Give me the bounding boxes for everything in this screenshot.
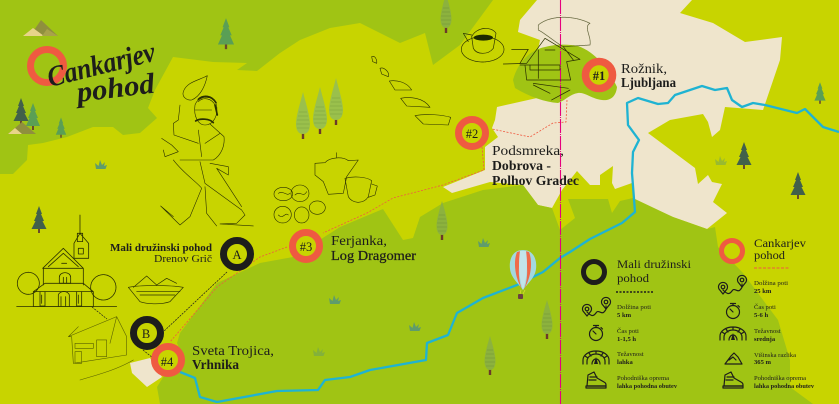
- icon: gauge: [720, 327, 746, 340]
- marker: #3 Ferjanka: [292, 232, 320, 260]
- marker: #1 Rožnik: [586, 62, 612, 88]
- label: Podsmreka, Dobrova - Polhov Gradec: [492, 143, 579, 188]
- marker: #2 Podsmreka: #2: [466, 127, 478, 141]
- text: distance: Dolžina poti: [617, 304, 651, 311]
- drawing: coffee cup: [461, 28, 504, 62]
- text: difficulty: lahka: [617, 359, 633, 366]
- label: Podsmreka, Dobrova - Polhov Gradec: Polhov Gradec: [492, 173, 579, 188]
- marker: B: B: [142, 327, 150, 341]
- label: Ferjanka, Log Dragomer: Log Dragomer: [331, 248, 417, 263]
- river: [180, 86, 839, 402]
- legend: Mali družinski pohod: [582, 257, 692, 390]
- text: gear: lahka pohodna obutev: [617, 383, 678, 390]
- text: time: 1-1,5 h: [617, 336, 636, 343]
- text: gear: Pohodniška oprema: [754, 375, 806, 382]
- marker: A: [224, 240, 250, 268]
- marker: #1 Rožnik: #1: [593, 69, 605, 83]
- marker: B: [134, 320, 160, 346]
- icon: cypress trees: [296, 0, 552, 375]
- label: Mali družinski pohod Drenov Grič: Mali družinski pohod: [110, 243, 212, 254]
- region: Rožnik forest: [513, 45, 617, 103]
- black dashed route: [92, 272, 227, 358]
- region: lower forest: [157, 185, 813, 404]
- text: difficulty: Težavnost: [617, 351, 644, 358]
- icon: boot: [723, 372, 743, 388]
- text: distance: [617, 304, 651, 319]
- icon: boot: [586, 372, 606, 388]
- drawing: pastries: [274, 185, 325, 223]
- text: distance: [754, 280, 788, 295]
- text: gear: [617, 375, 678, 390]
- drawing: Rožnik inn: [503, 17, 590, 100]
- text: time: 5-6 h: [754, 312, 768, 319]
- text: difficulty: srednja: [754, 336, 776, 343]
- text: time: [754, 303, 776, 319]
- municipal border line: [560, 0, 562, 404]
- drawing: farmhouse: [68, 317, 133, 380]
- text: difficulty: Težavnost: [754, 328, 781, 335]
- text: elevation: 365 m: [754, 359, 772, 366]
- marker: #4 Sveta Trojica: #4: [161, 355, 174, 369]
- text: gear: lahka pohodna obutev: [754, 383, 815, 390]
- text: distance: 25 km: [754, 288, 772, 295]
- icon: pine top: [218, 18, 234, 49]
- drawing: church: [17, 215, 117, 307]
- hot-air balloon: [510, 250, 536, 299]
- icon: grass tufts: [95, 156, 727, 356]
- marker: #4 Sveta Trojica: [154, 346, 182, 374]
- drawing: coffee pot and cups: [315, 153, 377, 202]
- marker: #2 Podsmreka: [458, 120, 486, 146]
- label: Ferjanka, Log Dragomer: Ferjanka,: [331, 233, 387, 248]
- icon: stopwatch: [590, 326, 602, 340]
- icon: gauge: [583, 351, 609, 364]
- logo: Cankarjev pohod: pohod: [72, 68, 157, 109]
- icon: mountain: [725, 353, 742, 364]
- text: difficulty: [754, 328, 781, 343]
- red dashed route: [170, 100, 567, 342]
- text: time: Čas poti: [754, 303, 776, 311]
- label: Rožnik, Ljubljana: [621, 61, 676, 90]
- legend ring red: [722, 240, 742, 262]
- text: elevation: [754, 352, 796, 366]
- text: elevation: Višinska razlika: [754, 352, 796, 359]
- logo ring: [30, 50, 64, 82]
- logo: Cankarjev pohod: [30, 36, 159, 109]
- label: Sveta Trojica, Vrhnika: [192, 343, 274, 372]
- icon: pine trees and hill left: [8, 98, 66, 138]
- legend heading: Mali družinski: [617, 257, 692, 271]
- label: Rožnik, Ljubljana: Ljubljana: [621, 75, 676, 90]
- drawing: basket: [128, 276, 183, 304]
- legend heading: [617, 257, 692, 285]
- label: Sveta Trojica, Vrhnika: Vrhnika: [192, 357, 239, 372]
- icon: stopwatch: [726, 304, 740, 318]
- text: gear: Pohodniška oprema: [617, 375, 669, 382]
- legend heading: Cankarjev: [754, 236, 806, 250]
- region: upper-left forest: [0, 0, 493, 174]
- label: Ferjanka, Log Dragomer: [331, 233, 417, 263]
- label: Podsmreka, Dobrova - Polhov Gradec: Dobrova -: [492, 158, 551, 173]
- icon: pines right: [736, 82, 826, 199]
- text: time: Čas poti: [617, 327, 639, 335]
- label: Sveta Trojica, Vrhnika: Sveta Trojica,: [192, 343, 274, 358]
- legend ring black: [584, 262, 604, 282]
- icon: route: [582, 297, 610, 316]
- drawing: Ivan Cankar figure: [161, 76, 253, 226]
- text: gear: [754, 375, 815, 390]
- icon: hills top: [23, 20, 58, 36]
- icon: route: [718, 275, 746, 294]
- logo: Cankarjev pohod: Cankarjev: [44, 36, 159, 94]
- label: Rožnik, Ljubljana: Rožnik,: [621, 61, 667, 76]
- icon: pine left: [32, 206, 46, 233]
- label: Podsmreka, Dobrova - Polhov Gradec: Podsmreka,: [492, 143, 564, 158]
- legend heading: [754, 236, 806, 262]
- label: Mali družinski pohod Drenov Grič: Drenov Grič: [154, 254, 212, 265]
- legend heading: pohod: [754, 248, 785, 262]
- label: Mali družinski pohod Drenov Grič: [110, 243, 212, 265]
- legend heading: pohod: [617, 271, 649, 285]
- marker: A: A: [232, 248, 242, 262]
- region: Vrhnika: [130, 358, 162, 387]
- drawing: path of footprints: [372, 56, 451, 125]
- text: distance: Dolžina poti: [754, 280, 788, 287]
- marker: #3 Ferjanka: #3: [300, 240, 312, 254]
- text: distance: 5 km: [617, 312, 632, 319]
- region: city of Ljubljana: [443, 0, 782, 229]
- legend: Cankarjev pohod: [718, 236, 815, 390]
- text: difficulty: [617, 351, 644, 366]
- text: time: [617, 327, 639, 343]
